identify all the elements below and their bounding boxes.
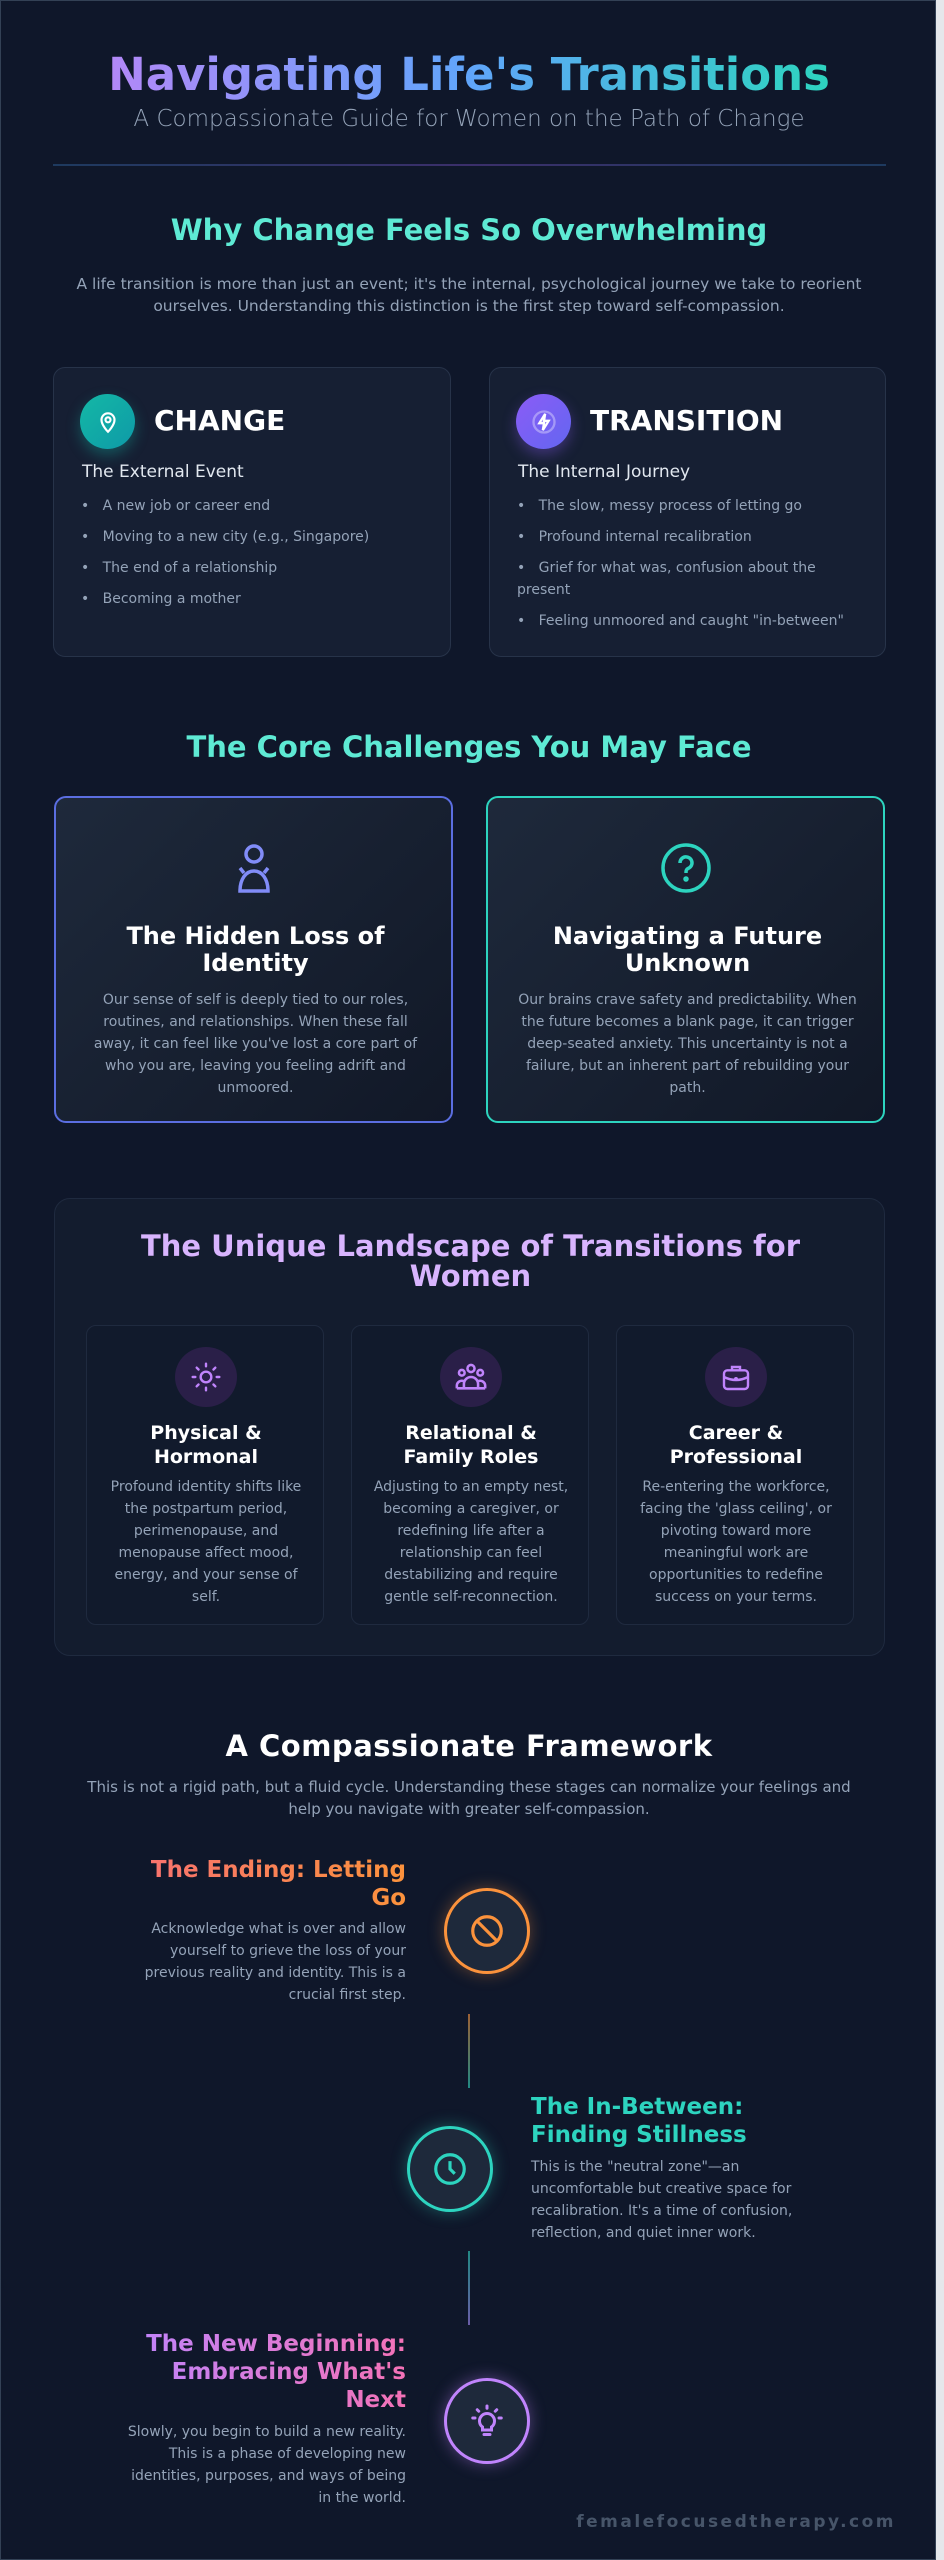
list: • A new job or career end [81, 498, 270, 514]
stage: ending: Acknowledge what is over and allow yourself to grieve the loss of your previous reality and identity. This is a crucial first step. [145, 1921, 406, 2003]
title: Navigating Life's Transitions [108, 48, 830, 101]
panel: change [53, 367, 451, 657]
heading: framework: A Compassionate Framework [225, 1729, 713, 1763]
icon: location pin [80, 394, 135, 449]
icon: family [440, 1347, 502, 1407]
stage: ending: The Ending: Letting Go [151, 1857, 406, 1911]
card: career [616, 1325, 854, 1625]
icon: beginning circle [444, 2378, 530, 2464]
panel: transition [489, 367, 886, 657]
title: The Hidden Loss of Identity [126, 922, 385, 977]
intro paragraph: A life transition is more than just an event; it's the internal, psychological journey we take to reorient ourselves. Understanding this distinction is the first step toward self-compassion. [76, 275, 862, 315]
arrow: connector 1 [468, 2014, 470, 2088]
card: career: Re-entering the workforce, facing the 'glass ceiling', or pivoting toward more meaningful work are opportunities to redefine success on your terms. [640, 1479, 832, 1605]
panel: loss of identity [54, 796, 453, 1123]
subtitle: A Compassionate Guide for Women on the Path of Change [133, 106, 805, 132]
card: physical: Profound identity shifts like the postpartum period, perimenopause, and menopause affect mood, energy, and your sense of self. [111, 1479, 301, 1605]
title: Navigating a Future Unknown [553, 922, 822, 977]
panel: future unknown [486, 796, 885, 1123]
list: • Grief for what was, confusion about the present [517, 560, 816, 598]
card: relational: Relational & Family Roles [404, 1422, 538, 1468]
stage: new beginning [128, 2331, 406, 2506]
heading: core challenges: The Core Challenges You May Face [186, 730, 752, 764]
icon: question [661, 843, 711, 893]
card: relational: Adjusting to an empty nest, becoming a caregiver, or redefining life after a relationship can feel destabilizing and require gentle self-reconnection. [374, 1479, 568, 1605]
stage: new beginning: Slowly, you begin to build a new reality. This is a phase of developing new identities, purposes, and ways of being in the world. [128, 2424, 406, 2506]
icon: ending circle [444, 1888, 530, 1974]
body: Our brains crave safety and predictability. When the future becomes a blank page, it can trigger deep-seated anxiety. This uncertainty is not a failure, but an inherent part of rebuilding your path. [518, 992, 857, 1096]
icon: in-between circle [407, 2126, 493, 2212]
panel: unique landscape [54, 1198, 885, 1656]
card: physical: Physical & Hormonal [150, 1422, 262, 1468]
icon: person [238, 844, 270, 893]
icon: sun [175, 1347, 237, 1407]
list: • Profound internal recalibration [517, 529, 752, 545]
stage: ending [145, 1857, 406, 2003]
list: • The end of a relationship [81, 560, 277, 576]
stage: in-between: The In-Between: Finding Stillness [531, 2094, 747, 2148]
subtitle: The External Event [82, 462, 244, 482]
stage: new beginning: The New Beginning: Embracing What's Next [146, 2331, 406, 2413]
framework intro: This is not a rigid path, but a fluid cycle. Understanding these stages can normalize your feelings and help you navigate with greater self-compassion. [87, 1778, 851, 1818]
arrow: connector 2 [468, 2251, 470, 2325]
list: • Becoming a mother [81, 591, 241, 607]
stage: in-between [530, 2094, 792, 2241]
list: • Feeling unmoored and caught "in-between" [517, 613, 844, 629]
card title: CHANGE [154, 404, 285, 437]
stage: in-between: This is the "neutral zone"—an uncomfortable but creative space for recalibration. It's a time of confusion, reflection, and quiet inner work. [531, 2159, 792, 2241]
icon: briefcase [705, 1347, 767, 1407]
card: physical [86, 1325, 324, 1625]
list [517, 498, 844, 629]
footer: femalefocusedtherapy.com [576, 2512, 896, 2532]
heading: The Unique Landscape of Transitions for Women [141, 1229, 800, 1293]
card title: TRANSITION [590, 404, 783, 437]
list: • Moving to a new city (e.g., Singapore) [81, 529, 369, 545]
list: • The slow, messy process of letting go [517, 498, 802, 514]
card: career: Career & Professional [670, 1422, 802, 1468]
icon: lightning [516, 394, 571, 449]
heading: why change: Why Change Feels So Overwhelming [171, 213, 767, 247]
body: Our sense of self is deeply tied to our roles, routines, and relationships. When these fall away, it can feel like you've lost a core part of who you are, leaving you feeling adrift and unmoored. [94, 992, 417, 1096]
list [81, 498, 369, 607]
card: relational [351, 1325, 589, 1625]
subtitle: The Internal Journey [518, 462, 690, 482]
